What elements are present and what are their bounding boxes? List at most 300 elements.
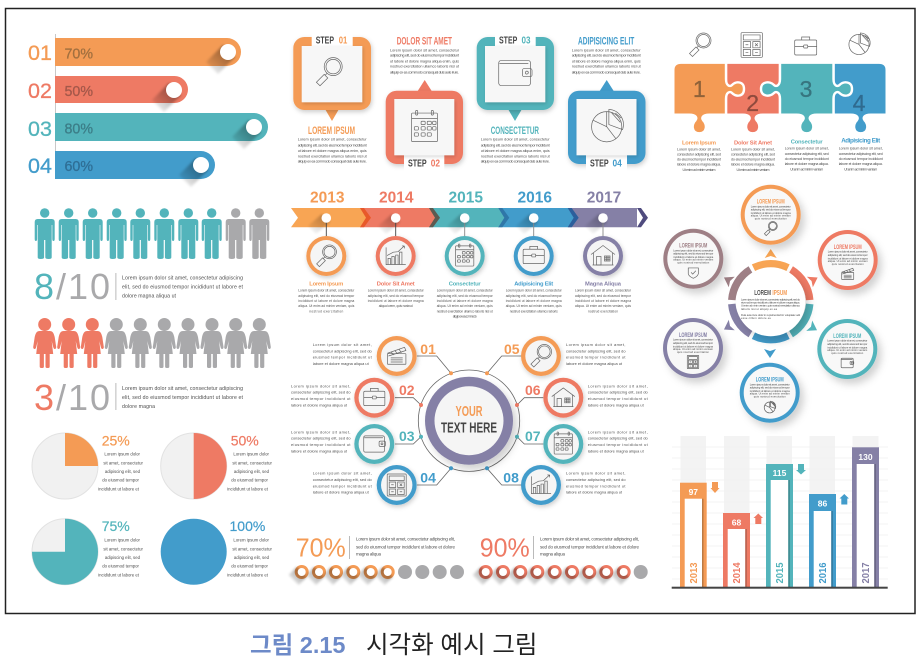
description: dolore magna aliqua ut	[122, 294, 177, 300]
pie 25%: 25%	[102, 432, 130, 448]
milestone 2016: Lorem ipsum dolor sit amet, consectetur	[506, 289, 563, 293]
bar 01 70%: 70%	[64, 46, 93, 62]
step 01: STEP	[316, 36, 334, 47]
node 03: eiusmod tempor incididunt ut	[291, 442, 351, 447]
panel: hub diagram	[291, 336, 649, 505]
node 08: consectetur adipiscing elit, sed do	[566, 477, 626, 482]
step 01: ut labore et dolore magna aliqua enim, quis	[298, 149, 367, 153]
node 03: labore et dolore magna aliqua ut	[291, 448, 348, 453]
pie 100%: adipiscing elit, sed	[234, 555, 270, 560]
panel: step process	[293, 30, 646, 171]
description: Lorem ipsum dolor sit amet, consectetur adipiscing	[122, 276, 243, 282]
milestone 2015: nostrud exercitation ullamco laboris nisi ut	[437, 309, 493, 313]
node 05: labore et dolore magna aliqua ut	[566, 361, 623, 366]
puzzle label 4: labore et dolore magna aliqua.	[839, 162, 883, 166]
node 07: eiusmod tempor incididunt ut	[588, 442, 649, 447]
node 04: consectetur adipiscing elit, sed do	[313, 477, 372, 482]
year labels: 2015	[448, 190, 483, 207]
circle upper right: aliqua. Ut enim ad minim veniam	[828, 259, 868, 263]
central text: esse cillum dolore eu	[741, 316, 771, 320]
node 04: 04	[420, 470, 436, 486]
dot row	[473, 565, 648, 585]
step 01: aliquip ex ea commodo consequat duis aute irure.	[298, 160, 367, 164]
description: Lorem ipsum dolor sit amet, consectetur adipiscing	[122, 386, 243, 392]
step 03: nostrud exercitation ullamco laboris nisi ut	[481, 154, 551, 158]
node 02: eiusmod tempor incididunt ut	[291, 396, 351, 401]
circle top	[741, 185, 801, 245]
node 01	[313, 336, 436, 376]
central text: laboris nisi ut aliquip ex ea	[741, 307, 777, 311]
milestone 2015: aliquip ex ea commodo	[453, 314, 477, 318]
icon: calculator	[741, 33, 762, 57]
circle lower right: incididunt ut labore et dolore magna	[827, 345, 868, 349]
caption: 시각화 예시 그림	[366, 631, 537, 659]
puzzle numbers	[693, 76, 866, 116]
step 02: DOLOR SIT AMET	[397, 36, 452, 48]
node 04: eiusmod tempor incididunt ut	[313, 483, 373, 488]
bar 04 60%: 04	[28, 154, 52, 178]
milestone 2016: aliqua. Ut enim ad minim veniam, quis	[506, 304, 562, 308]
puzzle label 2: do eiusmod tempor incididunt	[731, 157, 775, 161]
bar 04 60%	[28, 151, 215, 187]
icon: pie	[849, 33, 870, 55]
step 02: aliquip ex ea commodo consequat duis aute irure.	[390, 70, 459, 74]
node 08	[503, 465, 626, 505]
puzzle label 2: Lorem ipsum dolor sit amet,	[731, 148, 775, 152]
puzzle label 4: Adipisicing Elit	[841, 138, 880, 145]
node 01: Lorem ipsum dolor sit amet,	[313, 342, 372, 347]
milestone 2014: adipiscing elit, sed do eiusmod tempor	[368, 294, 425, 298]
panel: radial cycle	[663, 185, 878, 423]
bar 03 80%: 03	[28, 117, 52, 141]
circle lower right: quis nostrud exercitation	[831, 351, 864, 355]
bar 2015	[766, 464, 793, 588]
pie 75%: adipiscing elit, sed	[105, 555, 141, 560]
circle lower left: LOREM IPSUM	[679, 333, 707, 339]
central text	[736, 267, 805, 336]
puzzle label 3: Lorem ipsum dolor sit amet,	[785, 147, 829, 151]
panel: 70% dots: 70%	[296, 533, 346, 563]
milestone 2015: adipiscing elit, sed do eiusmod tempor	[437, 294, 494, 298]
bar 02 50%: 50%	[64, 84, 93, 100]
pie 75%: sit amet, consectetur	[103, 546, 144, 551]
circle top: adipiscing elit, sed do eiusmod tempor	[751, 208, 791, 212]
milestone 2017: adipiscing elit, sed do eiusmod tempor	[575, 294, 632, 298]
step 04: adipiscing elit, sed do eiusmod tempor incididunt	[572, 54, 642, 58]
bar 01 70%	[28, 38, 241, 74]
circle bottom: incididunt ut labore et dolore magna	[750, 389, 790, 393]
year labels: 2014	[379, 190, 414, 207]
step 03	[477, 30, 554, 164]
icon: briefcase	[795, 37, 817, 55]
circle upper right: quis nostrud exercitation	[832, 262, 864, 266]
puzzle numbers: 2	[746, 90, 759, 116]
node 05: 05	[504, 341, 520, 357]
node 04	[313, 465, 436, 505]
central text: Ut enim ad minim veniam, quis nostrud exercitation ullamco	[741, 304, 800, 308]
step 03: STEP	[499, 36, 518, 47]
node 02: Lorem ipsum dolor sit amet,	[291, 383, 350, 388]
circle upper left: adipiscing elit, sed do eiusmod tempor	[673, 252, 713, 256]
milestone 2015: incididunt ut labore et dolore magna	[437, 299, 493, 303]
panel: men pictogram 8/10	[34, 208, 269, 307]
step 01: 01	[339, 36, 348, 47]
women row	[33, 318, 271, 368]
circle top: incididunt ut labore et dolore magna	[751, 211, 791, 215]
circle bottom: adipiscing elit, sed do eiusmod tempor	[750, 386, 790, 390]
circle bottom: aliqua. Ut enim ad minim veniam	[750, 392, 790, 396]
node 07	[525, 424, 649, 464]
node 03: 03	[399, 428, 415, 444]
pie 100%: Lorem ipsum dolor	[233, 538, 270, 543]
milestone 2013: aliqua. Ut enim ad minim veniam, quis	[298, 304, 355, 308]
bar 04 60%: 60%	[64, 159, 93, 175]
node 07: 07	[525, 428, 541, 444]
trend arrows	[710, 464, 849, 524]
node 06: consectetur adipiscing elit, sed do	[588, 390, 648, 395]
milestone 2013: incididunt ut labore et dolore magna	[298, 299, 355, 303]
node 01: eiusmod tempor incididunt ut	[313, 355, 373, 360]
panel: 70% dots: sed do eiusmod tempor incididunt ut labore et dolore	[356, 544, 455, 549]
node 08: Lorem ipsum dolor sit amet,	[566, 471, 626, 476]
circle top: Lorem ipsum dolor sit amet, consectetur	[751, 204, 791, 208]
description: elit, sed do eiusmod tempor incididunt ut labore et	[122, 284, 244, 290]
pie 25%: Lorem ipsum dolor	[104, 452, 141, 457]
dot row	[289, 565, 464, 585]
pie 100%: sit amet, consectetur	[232, 546, 273, 551]
bar 2015: 2015	[775, 562, 786, 584]
circle upper left: Lorem ipsum dolor sit amet, consectetur	[673, 248, 713, 252]
pie 75%: Lorem ipsum dolor	[104, 538, 141, 543]
icon: magnifier	[690, 33, 711, 56]
pie 100%: incididunt ut labore et	[227, 572, 269, 577]
puzzle label 4	[839, 138, 883, 171]
puzzle label 3: consectetur adipiscing elit, sed	[785, 152, 829, 156]
node 05	[504, 336, 626, 376]
circle upper right: Lorem ipsum dolor sit amet, consectetur	[828, 250, 868, 254]
circle top: aliqua. Ut enim ad minim veniam	[751, 214, 791, 218]
circle upper right: LOREM IPSUM	[834, 245, 862, 251]
description	[122, 276, 244, 300]
puzzle label 2: consectetur adipiscing elit, sed	[731, 153, 775, 157]
circle lower right: LOREM IPSUM	[833, 334, 861, 340]
year labels	[310, 190, 621, 207]
bar 2014: 68	[732, 518, 741, 528]
bar 2017: 2017	[861, 562, 872, 584]
bar 02 50%	[28, 76, 188, 112]
caption	[250, 631, 537, 659]
puzzle label 3: Consectetur	[791, 139, 823, 145]
puzzle pieces	[673, 63, 887, 133]
step 02: 02	[431, 159, 440, 170]
pie 50%: do eiusmod tempor	[231, 478, 269, 483]
step 03: ut labore et dolore magna aliqua enim, quis	[481, 149, 550, 153]
panel: 70% dots	[289, 533, 464, 585]
central circle: TEXT HERE	[441, 420, 497, 437]
circle bottom: quis nostrud exercitation	[754, 395, 786, 399]
milestone 2016	[506, 213, 563, 313]
bar 2016	[809, 494, 836, 588]
puzzle label 4: Lorem ipsum dolor sit amet,	[839, 147, 883, 151]
panel: pie charts	[32, 432, 273, 585]
puzzle label 1: do eiusmod tempor incididunt	[677, 157, 721, 161]
milestone 2017: nostrud exercitation	[588, 309, 618, 313]
milestone 2015: Consectetur	[449, 281, 481, 287]
panel: progress bars	[28, 34, 268, 187]
milestone 2016: nostrud exercitation ullamco laboris	[510, 309, 558, 313]
milestone 2014: Lorem ipsum dolor sit amet, consectetur	[368, 289, 425, 293]
node 05: consectetur adipiscing elit, sed do	[566, 348, 626, 353]
circle lower left: adipiscing elit, sed do eiusmod tempor	[673, 341, 713, 345]
background columns	[680, 436, 878, 526]
circle upper left: incididunt ut labore et dolore magna	[673, 255, 714, 259]
milestone 2015: Lorem ipsum dolor sit amet, consectetur	[437, 289, 494, 293]
pie 25%: incididunt ut labore et	[98, 486, 140, 491]
node 08: eiusmod tempor incididunt ut	[566, 483, 626, 488]
node 08: 08	[503, 470, 519, 486]
circle top: LOREM IPSUM	[757, 200, 785, 206]
circle bottom: Lorem ipsum dolor sit amet, consectetur	[750, 382, 790, 386]
pie 100%	[161, 518, 273, 585]
puzzle label 4: do eiusmod tempor incididunt	[839, 157, 883, 161]
step 04: Lorem ipsum dolor sit amet, consectetur	[572, 49, 641, 53]
milestone 2016: incididunt ut labore et dolore magna	[506, 299, 562, 303]
step 03: Lorem ipsum dolor sit amet, consectetur	[481, 138, 550, 142]
circle lower right: adipiscing elit, sed do eiusmod tempor	[827, 342, 867, 346]
milestone 2015	[437, 213, 494, 318]
milestone 2014: incididunt ut labore et dolore magna	[368, 299, 424, 303]
circle lower left	[663, 318, 723, 378]
axis	[672, 587, 888, 589]
milestone 2013: adipiscing elit, sed do eiusmod tempor	[298, 294, 355, 298]
step 01: LOREM IPSUM	[308, 125, 355, 137]
node 02: 02	[399, 382, 415, 398]
circle lower left: incididunt ut labore et dolore magna	[673, 344, 714, 348]
central text: LOREM IPSUM	[754, 290, 787, 297]
puzzle label 2: Dolor Sit Amet	[734, 140, 772, 146]
circle upper right	[818, 230, 878, 290]
step 04: nostrud exercitation ullamco laboris nisi ut	[572, 65, 642, 69]
pie 50%: Lorem ipsum dolor	[233, 452, 270, 457]
step 04: ADIPISICING ELIT	[578, 36, 634, 48]
circle bottom	[740, 363, 800, 423]
milestone 2016: adipiscing elit, sed do eiusmod tempor	[506, 294, 563, 298]
pie 75%: 75%	[102, 518, 130, 534]
puzzle label 4: Ut enim ad minim veniam	[844, 167, 877, 171]
panel: bar chart	[672, 436, 888, 589]
men row	[35, 208, 269, 259]
direction arrows	[721, 249, 821, 358]
step 01: nostrud exercitation ullamco laboris nisi ut	[298, 154, 368, 158]
puzzle label 1: consectetur adipiscing elit, sed	[677, 153, 721, 157]
central text: eiusmod tempor incididunt ut labore et dolore magna aliqua.	[741, 300, 800, 304]
circle upper left	[663, 229, 723, 289]
circle top: quis nostrud exercitation	[755, 217, 787, 221]
pie 100%: do eiusmod tempor	[231, 564, 269, 569]
node 01: labore et dolore magna aliqua ut	[313, 361, 370, 366]
circle lower right: Lorem ipsum dolor sit amet, consectetur	[827, 339, 867, 343]
node 02	[291, 378, 415, 418]
node 07: Lorem ipsum dolor sit amet,	[588, 429, 648, 434]
circle lower left: quis nostrud exercitation	[677, 350, 710, 354]
puzzle label 2: Ut enim ad minim veniam	[736, 168, 770, 172]
step 02	[386, 36, 463, 171]
milestone 2014	[368, 213, 425, 308]
central circle: YOUR	[456, 403, 483, 420]
node 01: consectetur adipiscing elit, sed do	[313, 348, 372, 353]
bar 2014	[723, 513, 750, 588]
milestone 2013: Lorem ipsum dolor sit amet, consectetur	[298, 289, 355, 293]
step 02: STEP	[408, 159, 427, 170]
year labels: 2016	[517, 190, 552, 207]
node 06: Lorem ipsum dolor sit amet,	[588, 383, 648, 388]
node 07: labore et dolore magna aliqua ut	[588, 448, 645, 453]
milestone 2013: Lorem Ipsum	[309, 281, 343, 287]
step 02: Lorem ipsum dolor sit amet, consectetur	[390, 49, 460, 53]
circle upper left: aliqua. Ut enim ad minim veniam	[673, 258, 714, 262]
bar 02 50%: 02	[28, 79, 52, 103]
milestone 2015: aliqua. Ut enim ad minim veniam, quis	[437, 304, 493, 308]
milestone 2017: aliqua. Ut enim ad minim veniam, quis	[575, 304, 631, 308]
bar 2013	[680, 483, 707, 588]
year labels: 2013	[310, 190, 345, 207]
bar 2014: 2014	[732, 562, 743, 584]
puzzle label 3	[785, 139, 829, 171]
connector lines	[395, 356, 543, 485]
panel: 90% dots: Lorem ipsum dolor sit amet, consectetur adipiscing elit,	[540, 537, 639, 542]
milestone 2017: Magna Aliqua	[585, 281, 622, 287]
panel: 90% dots: magna aliqua	[540, 552, 565, 557]
pie 25%: adipiscing elit, sed	[105, 469, 141, 474]
panel: timeline	[291, 190, 648, 318]
description: elit, sed do eiusmod tempor incididunt ut labore et	[122, 395, 244, 401]
bar 2017	[852, 447, 879, 588]
step 04: aliquip ex ea commodo consequat duis aute irure.	[572, 70, 641, 74]
milestone 2016: Adipisicing Elit	[514, 281, 553, 287]
node 03	[291, 424, 415, 464]
node 03: Lorem ipsum dolor sit amet,	[291, 429, 350, 434]
year labels: 2017	[587, 190, 621, 207]
milestone 2014: aliqua lorem, quis nostrud	[379, 304, 413, 308]
milestone 2014: Dolor Sit Amet	[377, 281, 415, 287]
circle upper left: quis nostrud exercitation	[677, 261, 710, 265]
puzzle label 3: labore et dolore magna aliqua.	[785, 162, 829, 166]
pie 50%: incididunt ut labore et	[227, 486, 269, 491]
node 05: eiusmod tempor incididunt ut	[566, 355, 626, 360]
puzzle numbers: 3	[800, 76, 812, 102]
node 06: 06	[525, 382, 541, 398]
node 06: labore et dolore magna aliqua ut	[588, 402, 645, 407]
puzzle label 1: labore et dolore magna aliqua.	[677, 163, 721, 167]
description: dolore magna	[122, 404, 155, 410]
pie 50%	[161, 432, 273, 499]
node 08: labore et dolore magna aliqua ut	[566, 490, 623, 495]
pie 25%	[32, 432, 144, 499]
step 04: 04	[612, 159, 622, 170]
circle upper right: incididunt ut labore et dolore magna	[828, 256, 868, 260]
bar 2016: 2016	[818, 562, 829, 584]
description	[122, 386, 244, 410]
circle lower right	[817, 319, 877, 379]
milestone 2017	[575, 213, 632, 313]
pie 50%: adipiscing elit, sed	[234, 469, 270, 474]
node 02: consectetur adipiscing elit, sed do	[291, 390, 350, 395]
milestone 2017: incididunt ut labore et dolore magna	[575, 299, 631, 303]
puzzle label 2	[731, 140, 775, 172]
bar 2015: 115	[773, 468, 787, 478]
central ring	[732, 264, 810, 340]
puzzle label 1	[677, 140, 721, 172]
caption: 그림 2.15	[250, 632, 346, 658]
pie 50%: sit amet, consectetur	[232, 460, 273, 465]
node 06: eiusmod tempor incididunt ut	[588, 396, 649, 401]
milestone 2013: nostrud exercitation	[309, 309, 344, 313]
step 01: Lorem ipsum dolor sit amet, consectetur	[298, 138, 367, 142]
pie 75%: do eiusmod tempor	[102, 564, 140, 569]
step 03: aliquip ex ea commodo consequat duis aute irure.	[481, 160, 550, 164]
pie 25%: sit amet, consectetur	[103, 460, 144, 465]
step 02: adipiscing elit, sed do eiusmod tempor incididunt	[390, 54, 460, 58]
bar 2013: 2013	[689, 562, 700, 584]
circle lower left: aliqua. Ut enim ad minim veniam	[673, 347, 714, 351]
ratio 8/10: 8/10	[34, 266, 110, 307]
arrow band	[291, 208, 648, 227]
puzzle label 4: consectetur adipiscing elit, sed	[839, 152, 883, 156]
bar 01 70%: 01	[28, 41, 52, 65]
panel: 90% dots: sed do eiusmod tempor incididunt ut labore et dolore	[540, 544, 639, 549]
puzzle numbers: 4	[853, 90, 866, 116]
step 03: adipiscing elit, sed do eiusmod tempor incididunt	[481, 143, 551, 147]
step 04: STEP	[590, 159, 609, 170]
bar 03 80%	[28, 113, 268, 149]
ratio 3/10: 3/10	[34, 377, 110, 418]
puzzle label 1: Ut enim ad minim veniam	[682, 168, 716, 172]
central text: Lorem ipsum dolor sit amet, consectetur adipiscing elit, sed do	[741, 298, 800, 302]
puzzle label 1: Lorem ipsum dolor sit amet,	[677, 148, 721, 152]
milestone 2017: Lorem ipsum dolor sit amet, consectetur	[575, 289, 632, 293]
node 07: consectetur adipiscing elit, sed do	[588, 436, 648, 441]
panel: 90% dots	[473, 533, 648, 585]
pie 100%: 100%	[230, 518, 265, 534]
step 03: CONSECTETUR	[491, 125, 539, 137]
connector dots	[419, 371, 519, 470]
panel: 70% dots: magna aliqua	[356, 552, 381, 557]
bar 03 80%: 80%	[64, 122, 93, 138]
puzzle label 2: labore et dolore magna aliqua.	[731, 163, 775, 167]
panel: puzzle	[673, 33, 887, 172]
node 01: 01	[420, 341, 436, 357]
bar 2016: 86	[818, 498, 827, 508]
bar 2013: 97	[689, 487, 698, 497]
central circle	[425, 377, 513, 465]
node 06	[525, 378, 649, 418]
node 03: consectetur adipiscing elit, sed do	[291, 436, 350, 441]
circle bottom: LOREM IPSUM	[756, 378, 784, 384]
node 02: labore et dolore magna aliqua ut	[291, 402, 348, 407]
step 02: ut labore et dolore magna aliqua enim, quis	[390, 59, 459, 63]
panel: women pictogram 3/10	[33, 318, 271, 418]
circle upper left: LOREM IPSUM	[679, 244, 707, 250]
step 01: adipiscing elit, sed do eiusmod tempor incididunt	[298, 143, 368, 147]
panel: 90% dots: 90%	[480, 533, 530, 563]
pie 75%: incididunt ut labore et	[98, 572, 140, 577]
node 04: Lorem ipsum dolor sit amet,	[313, 471, 372, 476]
pie 50%: 50%	[231, 432, 259, 448]
puzzle label 3: Ut enim ad minim veniam	[790, 167, 823, 171]
puzzle label 3: do eiusmod tempor incididunt	[785, 157, 829, 161]
step 03: 03	[522, 36, 531, 47]
circle upper right: adipiscing elit, sed do eiusmod tempor	[828, 253, 868, 257]
